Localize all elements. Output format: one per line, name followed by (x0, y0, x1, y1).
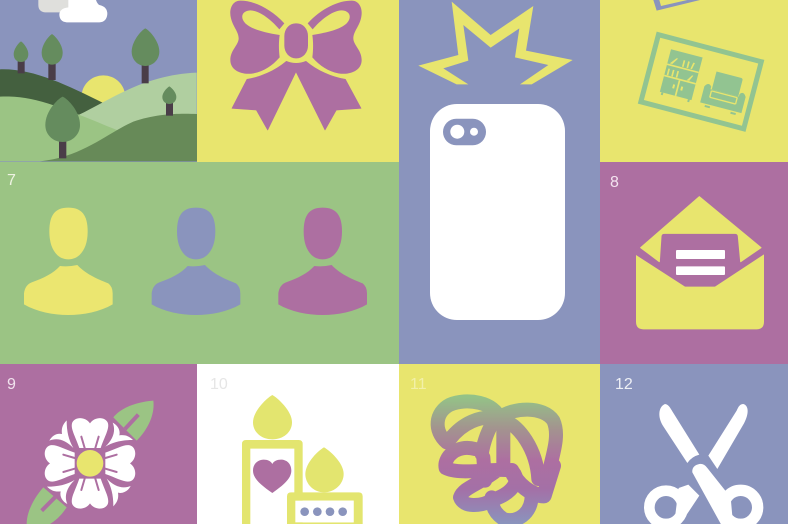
icon: bow tails (232, 61, 361, 130)
icon: flower centre (77, 450, 103, 477)
tree 3 (132, 28, 159, 83)
icon: candle dots (300, 507, 347, 516)
icon: upper leaf (113, 401, 154, 441)
number 11: 11 (410, 376, 427, 393)
number 9: 9 (7, 376, 16, 393)
number 8: 8 (610, 174, 619, 191)
icon: small candle (287, 447, 363, 524)
panel: bow (197, 0, 399, 162)
number 7: 7 (7, 172, 16, 189)
icon: sun (81, 75, 125, 119)
icon: yellow person (24, 208, 113, 315)
armchair (699, 69, 750, 116)
icon: heart (253, 460, 291, 493)
icon: tall candle (242, 395, 303, 524)
icon: purple person (278, 208, 367, 315)
icon: flash burst (418, 2, 573, 84)
icon: phone camera (443, 119, 486, 145)
icon: flower side petals (47, 420, 133, 506)
number 10: 10 (210, 376, 228, 393)
icon: envelope body (636, 254, 764, 329)
bookshelf (659, 49, 703, 103)
icon: grey cloud (38, 0, 70, 12)
dark hill (0, 69, 104, 116)
panel: scribble (399, 364, 600, 524)
panel: people (0, 162, 399, 364)
panel: flower (0, 364, 197, 524)
panel: picture frame (600, 0, 788, 162)
tree 2 (42, 34, 63, 80)
number 12: 12 (615, 376, 633, 393)
panel: landscape (0, 0, 197, 162)
icon: white cloud (59, 0, 107, 22)
panel: envelope (600, 162, 788, 364)
left hill (0, 97, 118, 161)
icon: flower main petals (45, 418, 135, 509)
tree 1 (14, 41, 28, 73)
icon: scissors (649, 404, 758, 524)
icon: phone body (430, 104, 565, 320)
icon: bow left wing (230, 1, 284, 74)
panel: phone (399, 0, 600, 364)
icon: blue frame corner (653, 0, 700, 11)
light hill (78, 73, 197, 147)
icon: lower leaf (27, 487, 67, 524)
icon: tangled scribble (438, 401, 556, 520)
icon: framed room (638, 32, 764, 132)
tree 4 (162, 86, 176, 116)
icon: envelope flap (641, 197, 761, 262)
icon: blue person (152, 208, 240, 315)
icon: letter lines (676, 250, 725, 275)
front hill (40, 114, 197, 161)
panel: candles (197, 364, 399, 524)
icon: bow knot (284, 23, 308, 58)
icon: bow right wing (308, 1, 362, 74)
tree 5 (45, 97, 80, 158)
panel: scissors (600, 364, 788, 524)
